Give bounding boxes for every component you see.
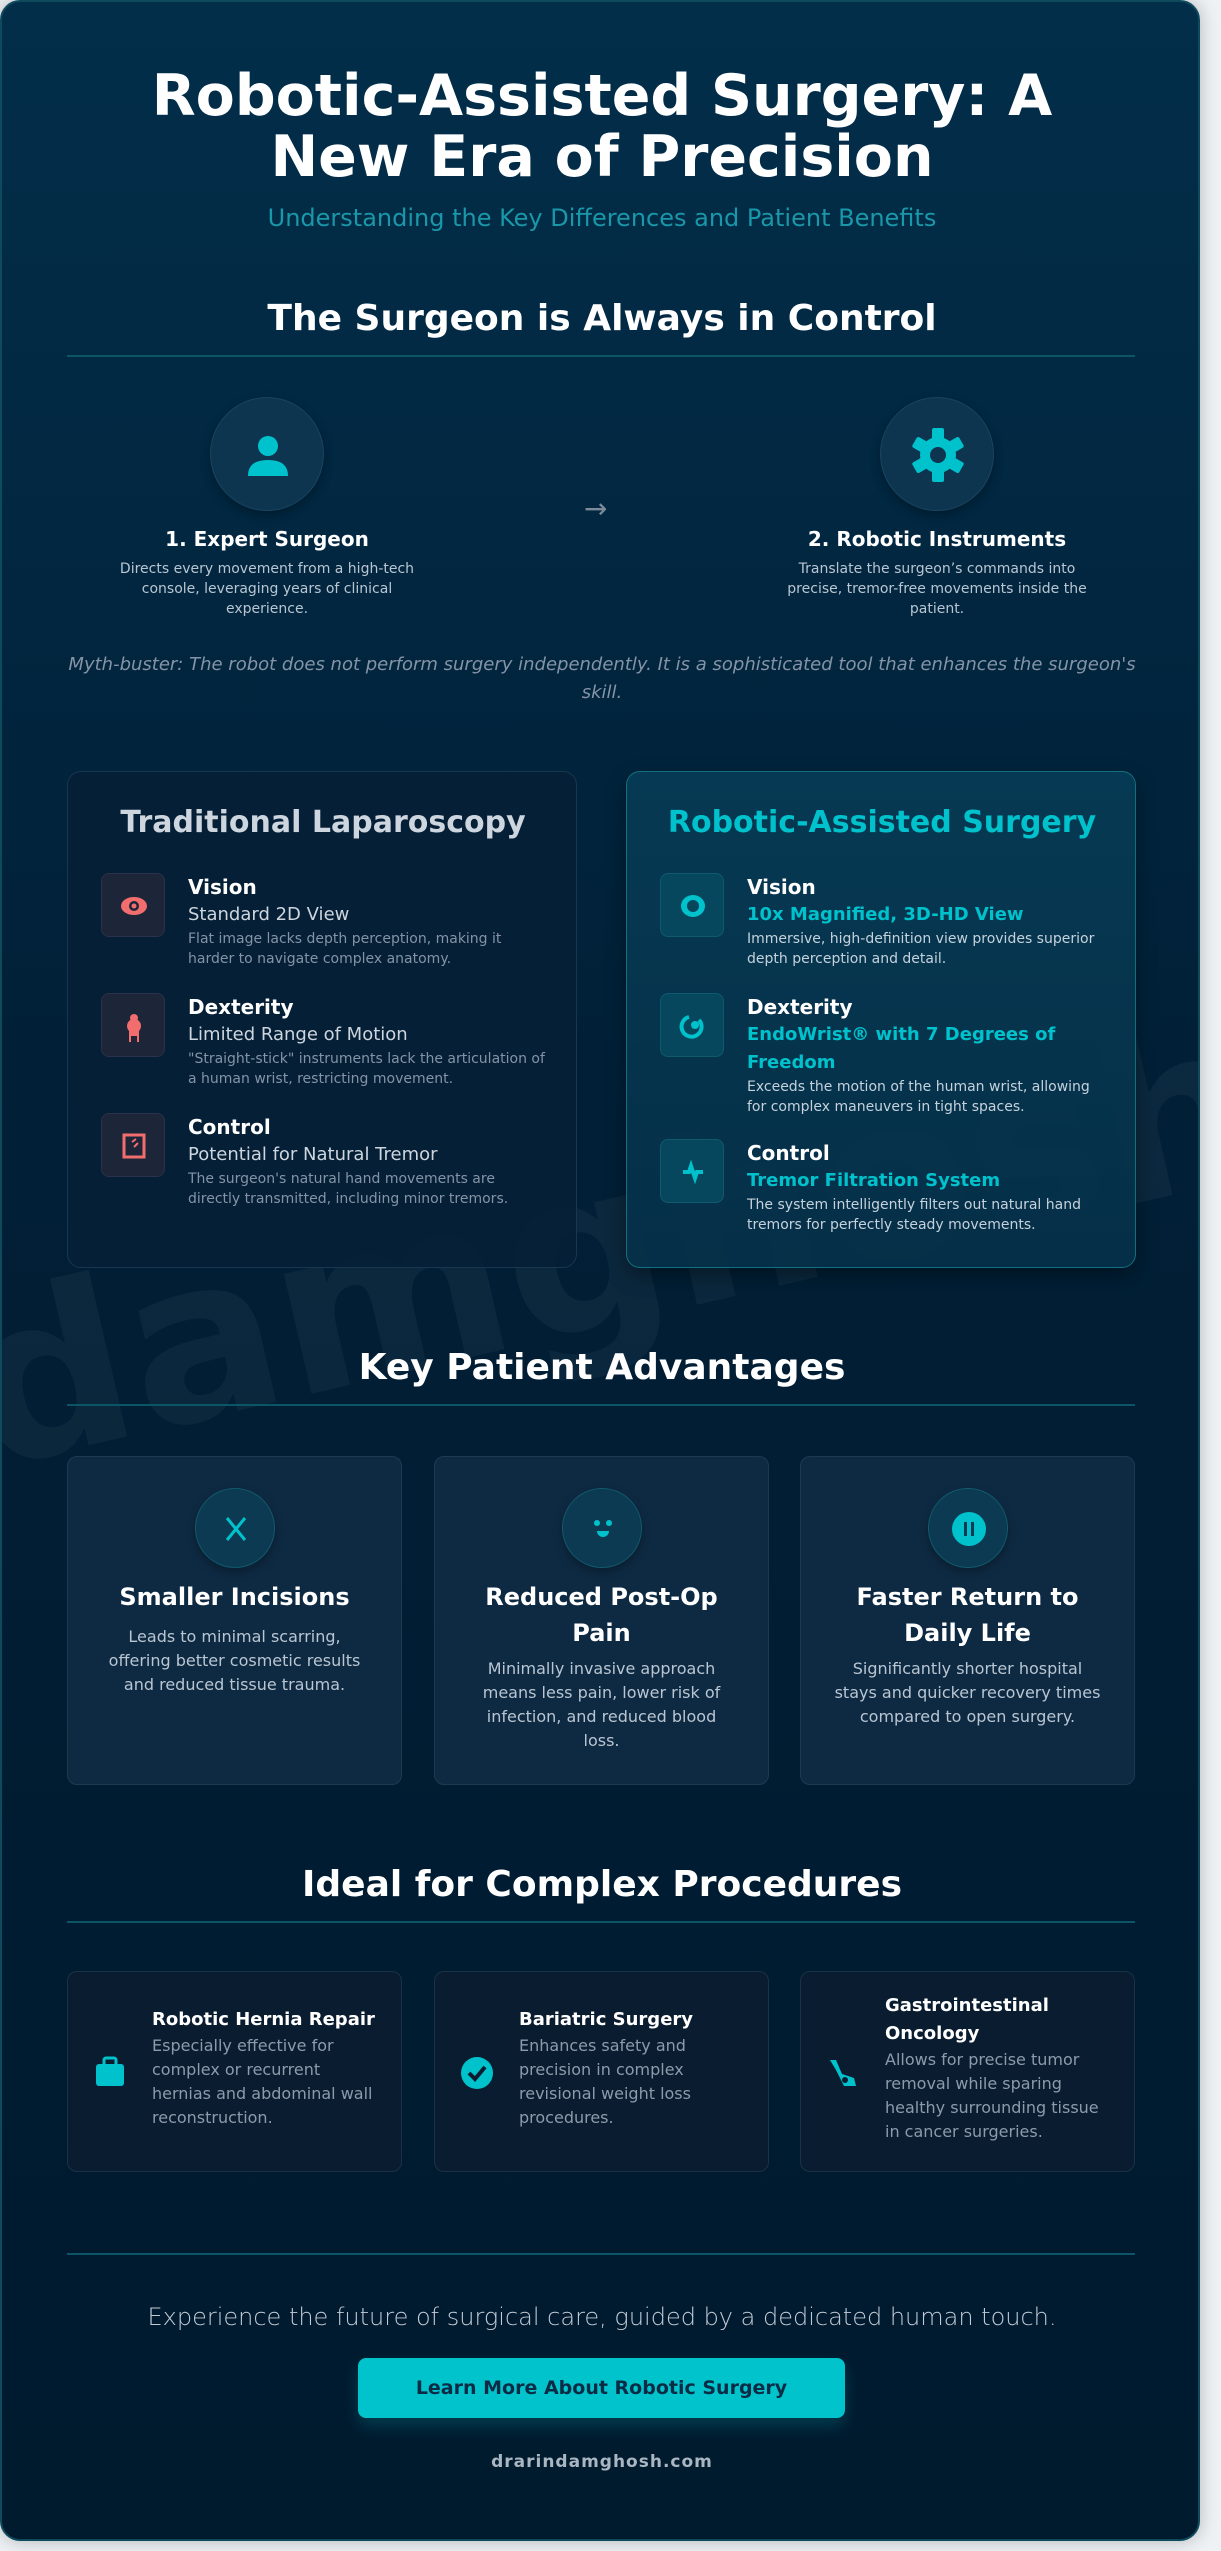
item: dexterity: EndoWrist® with 7 Degrees of Freedom xyxy=(747,1024,1055,1073)
item: dexterity: Exceeds the motion of the human wrist, allowing for complex maneuvers in tight spaces. xyxy=(747,1079,1090,1115)
item: control xyxy=(660,1139,1081,1233)
item: dexterity: "Straight-stick" instruments lack the articulation of a human wrist, restricting movement. xyxy=(188,1051,545,1087)
step: expert surgeon xyxy=(120,397,414,617)
card: smaller incisions xyxy=(67,1456,402,1785)
tagline: Experience the future of surgical care, guided by a dedicated human touch. xyxy=(147,2303,1057,2331)
item: control: Control xyxy=(747,1141,830,1165)
item: dexterity: Dexterity xyxy=(747,995,853,1019)
item: vision: Vision xyxy=(747,875,816,899)
card: reduced pain: Minimally invasive approach means less pain, lower risk of infection, and reduced blood loss. xyxy=(483,1659,720,1750)
card: GI oncology: Gastrointestinal Oncology xyxy=(885,1995,1049,2044)
panel title: Traditional Laparoscopy xyxy=(120,805,526,840)
icon: person xyxy=(210,397,324,511)
card: hernia repair: Robotic Hernia Repair xyxy=(152,2009,375,2030)
item: vision: Immersive, high-definition view provides superior depth perception and detail. xyxy=(747,931,1094,967)
card: smaller incisions: Smaller Incisions xyxy=(119,1583,350,1611)
card: GI oncology: Allows for precise tumor removal while sparing healthy surrounding tissue in cancer surgeries. xyxy=(885,2050,1099,2141)
card: bariatric: Bariatric Surgery xyxy=(519,2009,693,2030)
item: dexterity xyxy=(660,993,1090,1115)
item: dexterity: Dexterity xyxy=(188,995,294,1019)
step title: 2. Robotic Instruments xyxy=(808,527,1066,551)
card: smaller incisions: Leads to minimal scarring, offering better cosmetic results and reduced tissue trauma. xyxy=(109,1627,360,1694)
title: New Era of Precision xyxy=(270,124,934,190)
subtitle: Understanding the Key Differences and Patient Benefits xyxy=(268,204,936,232)
domain: drarindamghosh.com xyxy=(491,2452,713,2472)
item: control: Tremor Filtration System xyxy=(747,1170,1000,1191)
item: dexterity: Limited Range of Motion xyxy=(188,1024,408,1045)
icon: check xyxy=(461,2057,493,2089)
item: control: The system intelligently filters out natural hand tremors for perfectly steady movements. xyxy=(747,1197,1081,1233)
icon: bag xyxy=(96,2056,124,2086)
card: hernia repair xyxy=(67,1971,402,2172)
icon: x xyxy=(195,1488,275,1568)
button: Learn More About Robotic Surgery xyxy=(416,2377,787,2399)
card: reduced pain: Reduced Post-Op Pain xyxy=(485,1583,718,1647)
step text: Translate the surgeon’s commands into precise, tremor-free movements inside the patient. xyxy=(787,561,1087,617)
item: vision xyxy=(101,873,501,967)
panel: robotic-assisted surgery xyxy=(626,771,1136,1268)
icon: pause xyxy=(928,1488,1008,1568)
step: robotic instruments xyxy=(787,397,1087,617)
item: control: Potential for Natural Tremor xyxy=(188,1144,438,1165)
item: control: The surgeon's natural hand movements are directly transmitted, including minor tremors. xyxy=(188,1171,508,1207)
item: vision: 10x Magnified, 3D-HD View xyxy=(747,904,1024,925)
title xyxy=(152,63,1052,190)
icon: gear xyxy=(880,397,994,511)
item: vision xyxy=(660,873,1094,967)
card: hernia repair: Especially effective for complex or recurrent hernias and abdominal wall reconstruction. xyxy=(152,2036,372,2127)
card: faster return xyxy=(800,1456,1135,1785)
title: Robotic-Assisted Surgery: A xyxy=(152,63,1052,129)
button xyxy=(358,2358,845,2418)
panel: traditional laparoscopy xyxy=(67,771,577,1268)
icon: instrument xyxy=(830,2060,856,2086)
heading: complex procedures: Ideal for Complex Procedures xyxy=(302,1864,902,1905)
item: control: Control xyxy=(188,1115,271,1139)
icon: face xyxy=(562,1488,642,1568)
panel title: Robotic-Assisted Surgery xyxy=(668,805,1096,840)
card: faster return: Faster Return to Daily Life xyxy=(857,1583,1078,1647)
card: bariatric: Enhances safety and precision in complex revisional weight loss procedures. xyxy=(519,2036,691,2127)
item: vision: Flat image lacks depth perception, making it harder to navigate complex anatomy. xyxy=(188,931,501,967)
card: faster return: Significantly shorter hospital stays and quicker recovery times compared to open surgery. xyxy=(835,1659,1100,1726)
item: dexterity xyxy=(101,993,546,1087)
card: bariatric xyxy=(434,1971,769,2172)
myth-buster: Myth-buster: The robot does not perform surgery independently. It is a sophisticated tool that enhances the surgeon's skill. xyxy=(68,654,1136,703)
item: control xyxy=(101,1113,508,1207)
card: GI oncology xyxy=(800,1971,1135,2172)
heading: surgeon control: The Surgeon is Always in Control xyxy=(267,298,937,339)
card: reduced pain xyxy=(434,1456,769,1785)
step title: 1. Expert Surgeon xyxy=(165,527,369,551)
item: vision: Standard 2D View xyxy=(188,904,349,925)
step text: Directs every movement from a high-tech console, leveraging years of clinical experience. xyxy=(120,561,414,617)
arrow: → xyxy=(584,492,607,525)
heading: key patient advantages: Key Patient Advantages xyxy=(359,1347,845,1388)
item: vision: Vision xyxy=(188,875,257,899)
